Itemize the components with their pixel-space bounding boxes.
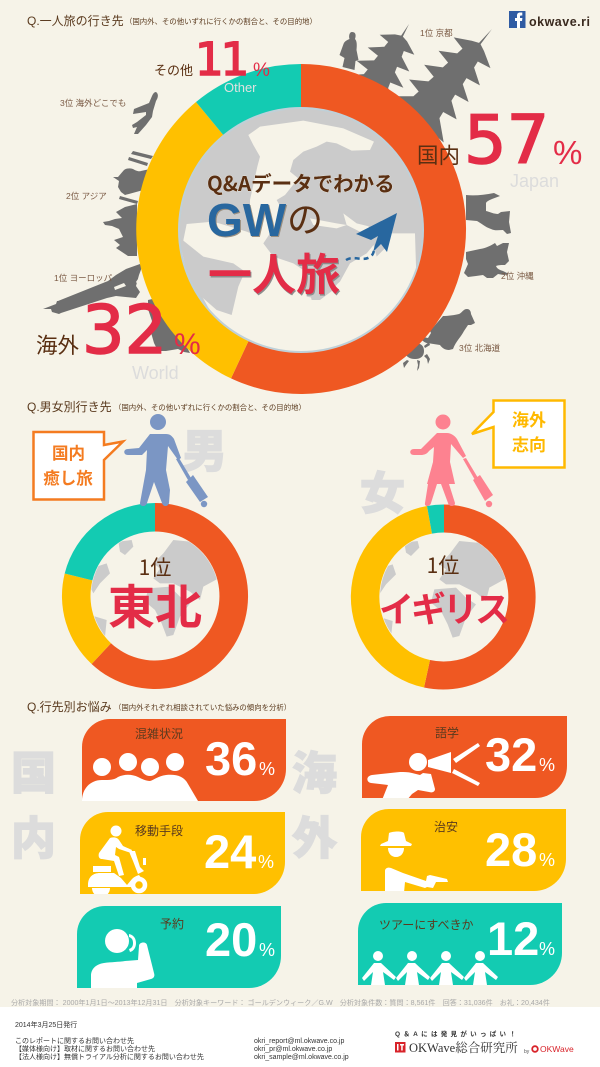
percentage label: domestic: Japan [510, 171, 559, 191]
rank labels [54, 28, 534, 353]
icon: person on phone [91, 929, 154, 988]
percentage label: domestic: % [553, 134, 582, 171]
ring segment: orange [92, 503, 248, 689]
panel: transport 24%: 移動手段 [135, 822, 183, 839]
callout: overseas oriented [472, 400, 564, 468]
icon: asian temple [113, 151, 153, 204]
panel: congestion 36%: 混雑状況 [135, 725, 183, 742]
callout: overseas oriented: 志向 [512, 431, 546, 456]
map: male destinations [92, 540, 217, 636]
heading: gender question: （国内外、その他いずれに行くかの割合と、その目的地） [114, 403, 306, 412]
ring segment: yellow [62, 574, 111, 664]
rank labels: 3位 海外どこでも [60, 98, 126, 108]
female donut text: 1位 [427, 550, 459, 580]
contact information: okri_sample@ml.okwave.co.jp [254, 1054, 349, 1061]
percentage label: other: 11 [195, 33, 246, 86]
contact information: okri_pr@ml.okwave.co.jp [254, 1046, 332, 1053]
ring segment: other 11% [196, 64, 301, 229]
center title [207, 167, 395, 304]
ghost label: overseas: 外 [292, 802, 337, 867]
heading: gender question [27, 400, 306, 414]
rank labels: 1位 ヨーロッパ [54, 273, 113, 283]
panel: language 32%: % [539, 755, 555, 775]
panel: congestion 36%: % [259, 759, 275, 779]
logo: OKWave research institute: OKWave総合研究所 [409, 1040, 518, 1055]
center title: 一人旅 [208, 239, 340, 303]
panel: security 28% [361, 809, 566, 893]
icon: group of travellers [362, 951, 498, 985]
center title: の [287, 191, 323, 243]
panel: tour 12%: ツアーにすべきか [379, 916, 474, 933]
map: lower oceans [180, 222, 417, 360]
icon: airplane [132, 92, 158, 134]
map: female destinations [380, 541, 506, 638]
percentage label: overseas: 32 [82, 291, 167, 369]
panel: tour 12% [358, 903, 562, 985]
callout: overseas oriented: 海外 [512, 406, 546, 431]
map: india [368, 226, 384, 256]
ghost label: domestic: 国 [11, 737, 56, 802]
rank labels: 3位 北海道 [459, 343, 501, 353]
heading: destination question: （国内外、その他いずれに行くかの割合と、その目的地） [125, 17, 317, 26]
center title: Q&Aデータでわかる [207, 167, 395, 197]
male donut text: 1位 [139, 552, 171, 582]
female donut chart [351, 504, 536, 689]
icon: eiffel tower openings [114, 276, 144, 290]
icon: female traveller [410, 414, 493, 507]
heading: worries question: Q.行先別お悩み [27, 700, 112, 714]
ring segment: teal [65, 503, 155, 580]
icon: crowd [82, 753, 198, 801]
callout: domestic healing trip [34, 432, 123, 500]
panel: booking 20%: 20 [205, 913, 257, 966]
ghost label: overseas [292, 737, 337, 867]
panel: tour 12%: % [539, 939, 555, 959]
percentage label: overseas: 海外 [36, 329, 80, 360]
callout: domestic healing trip: 国内 [52, 440, 85, 464]
ghost label: overseas: 海 [292, 737, 337, 802]
ring segment: overseas 32% [136, 102, 301, 378]
silhouettes: overseas landmarks [43, 92, 190, 353]
percentage label: overseas [36, 291, 201, 383]
center title: GW [207, 194, 287, 246]
percentage label: overseas: World [132, 363, 179, 383]
logo: OKWave research institute: by [524, 1049, 530, 1055]
percentage label: other: % [253, 60, 270, 81]
ring segment: yellow [351, 506, 432, 688]
icon: man with gun [380, 832, 448, 893]
footer panel [0, 1007, 600, 1067]
percentage label: overseas: % [174, 328, 201, 361]
map: mediterranean [310, 218, 347, 228]
contact information: 【法人様向け】無償トライアル分析に関するお問い合わせ先 [15, 1052, 204, 1061]
heading: destination question: Q.一人旅の行き先 [27, 14, 124, 28]
rank labels: 2位 沖縄 [501, 271, 534, 281]
panel: security 28%: % [539, 850, 555, 870]
panel: booking 20% [77, 906, 281, 988]
female donut text [379, 550, 508, 633]
ghost label: domestic: 内 [11, 802, 56, 867]
icon: eiffel tower [43, 264, 142, 314]
contact information [15, 1020, 349, 1061]
icon: cow [417, 309, 475, 350]
ring segment: teal [427, 504, 444, 534]
panel: tour 12%: 12 [487, 912, 539, 965]
icon: crab [396, 335, 430, 371]
rank labels: 2位 アジア [66, 191, 107, 201]
icon: tower spires [103, 204, 137, 256]
percentage label: domestic [417, 101, 582, 191]
center title: GW [208, 195, 288, 247]
contact information: 2014年3月25日発行 [15, 1020, 77, 1029]
panel: congestion 36% [82, 719, 286, 801]
percentage label: domestic: 57 [464, 101, 549, 179]
ghost label: domestic [11, 737, 56, 867]
heading: worries question: （国内外それぞれ相談されていた悩みの傾向を分析） [114, 703, 291, 712]
heading: worries question [27, 700, 291, 714]
male donut text: 東北 [108, 569, 202, 638]
panel: security 28%: 治安 [434, 818, 458, 835]
icon: statue [340, 32, 358, 70]
percentage label: other: その他 [154, 60, 193, 79]
panel: security 28%: 28 [485, 823, 537, 876]
heading: destination question [27, 14, 317, 28]
panel: language 32%: 語学 [435, 724, 459, 741]
map: arctic ocean [248, 121, 374, 243]
percentage label: other [154, 33, 270, 95]
logo: OKWave research institute: OKWave [540, 1044, 574, 1054]
male donut chart [62, 503, 248, 689]
panel: language 32%: 32 [485, 728, 537, 781]
world map disc [178, 108, 423, 360]
contact information: okri_report@ml.okwave.co.jp [254, 1038, 344, 1045]
contact information: このレポートに関するお問い合わせ先 [15, 1036, 134, 1045]
icon: male traveller [124, 414, 208, 507]
panel: transport 24%: 24 [204, 825, 256, 878]
panel: transport 24% [80, 812, 285, 897]
panel: language 32% [362, 716, 567, 800]
icon: shisa lower [464, 243, 509, 278]
icon: person with megaphone [367, 743, 480, 800]
percentage label: other: Other [224, 80, 257, 95]
map: south america [182, 240, 243, 315]
icon: pagoda two [389, 6, 520, 143]
logo: OKWave research institute [395, 1029, 574, 1055]
logo: OKWave research institute: Q＆Aには発見がいっぱい！ [395, 1029, 519, 1038]
map: north africa [264, 234, 336, 300]
percentage label: domestic: 国内 [417, 139, 460, 170]
center title: 一人旅 [209, 240, 341, 304]
ghost label: female: 女 [360, 457, 405, 522]
icon: shisa upper [466, 193, 511, 234]
silhouettes: domestic landmarks [340, 6, 520, 371]
main donut chart [136, 64, 466, 394]
callout: domestic healing trip: 癒し旅 [43, 465, 93, 489]
facebook badge: okwave.ri [529, 15, 590, 29]
female donut text: イギリス [379, 582, 508, 633]
panel: booking 20%: 予約 [160, 915, 184, 932]
panel: transport 24%: % [258, 852, 274, 872]
ring segment: domestic 57% [231, 64, 466, 394]
analysis note: 分析対象期間： 2000年1月1日～2013年12月31日 分析対象キーワード： ゴールデンウィーク／G.W 分析対象件数：質問：8,561件 回答：31,036件 お礼：20,434件 [11, 998, 550, 1007]
facebook badge [509, 11, 590, 29]
panel: congestion 36%: 36 [205, 732, 257, 785]
ring segment: orange [424, 504, 536, 689]
icon: scooter rider [88, 826, 146, 897]
rank labels: 1位 京都 [420, 28, 453, 38]
panel: booking 20%: % [259, 940, 275, 960]
ghost label: male: 男 [182, 415, 227, 480]
heading: gender question: Q.男女別行き先 [27, 400, 112, 414]
map: arabian sea [344, 214, 369, 232]
icon: paper plane with dashed path [346, 213, 397, 260]
icon: stone tower [148, 298, 190, 353]
icon: pagoda one [342, 10, 434, 111]
contact information: 【媒体様向け】取材に関するお問い合わせ先 [15, 1044, 155, 1053]
